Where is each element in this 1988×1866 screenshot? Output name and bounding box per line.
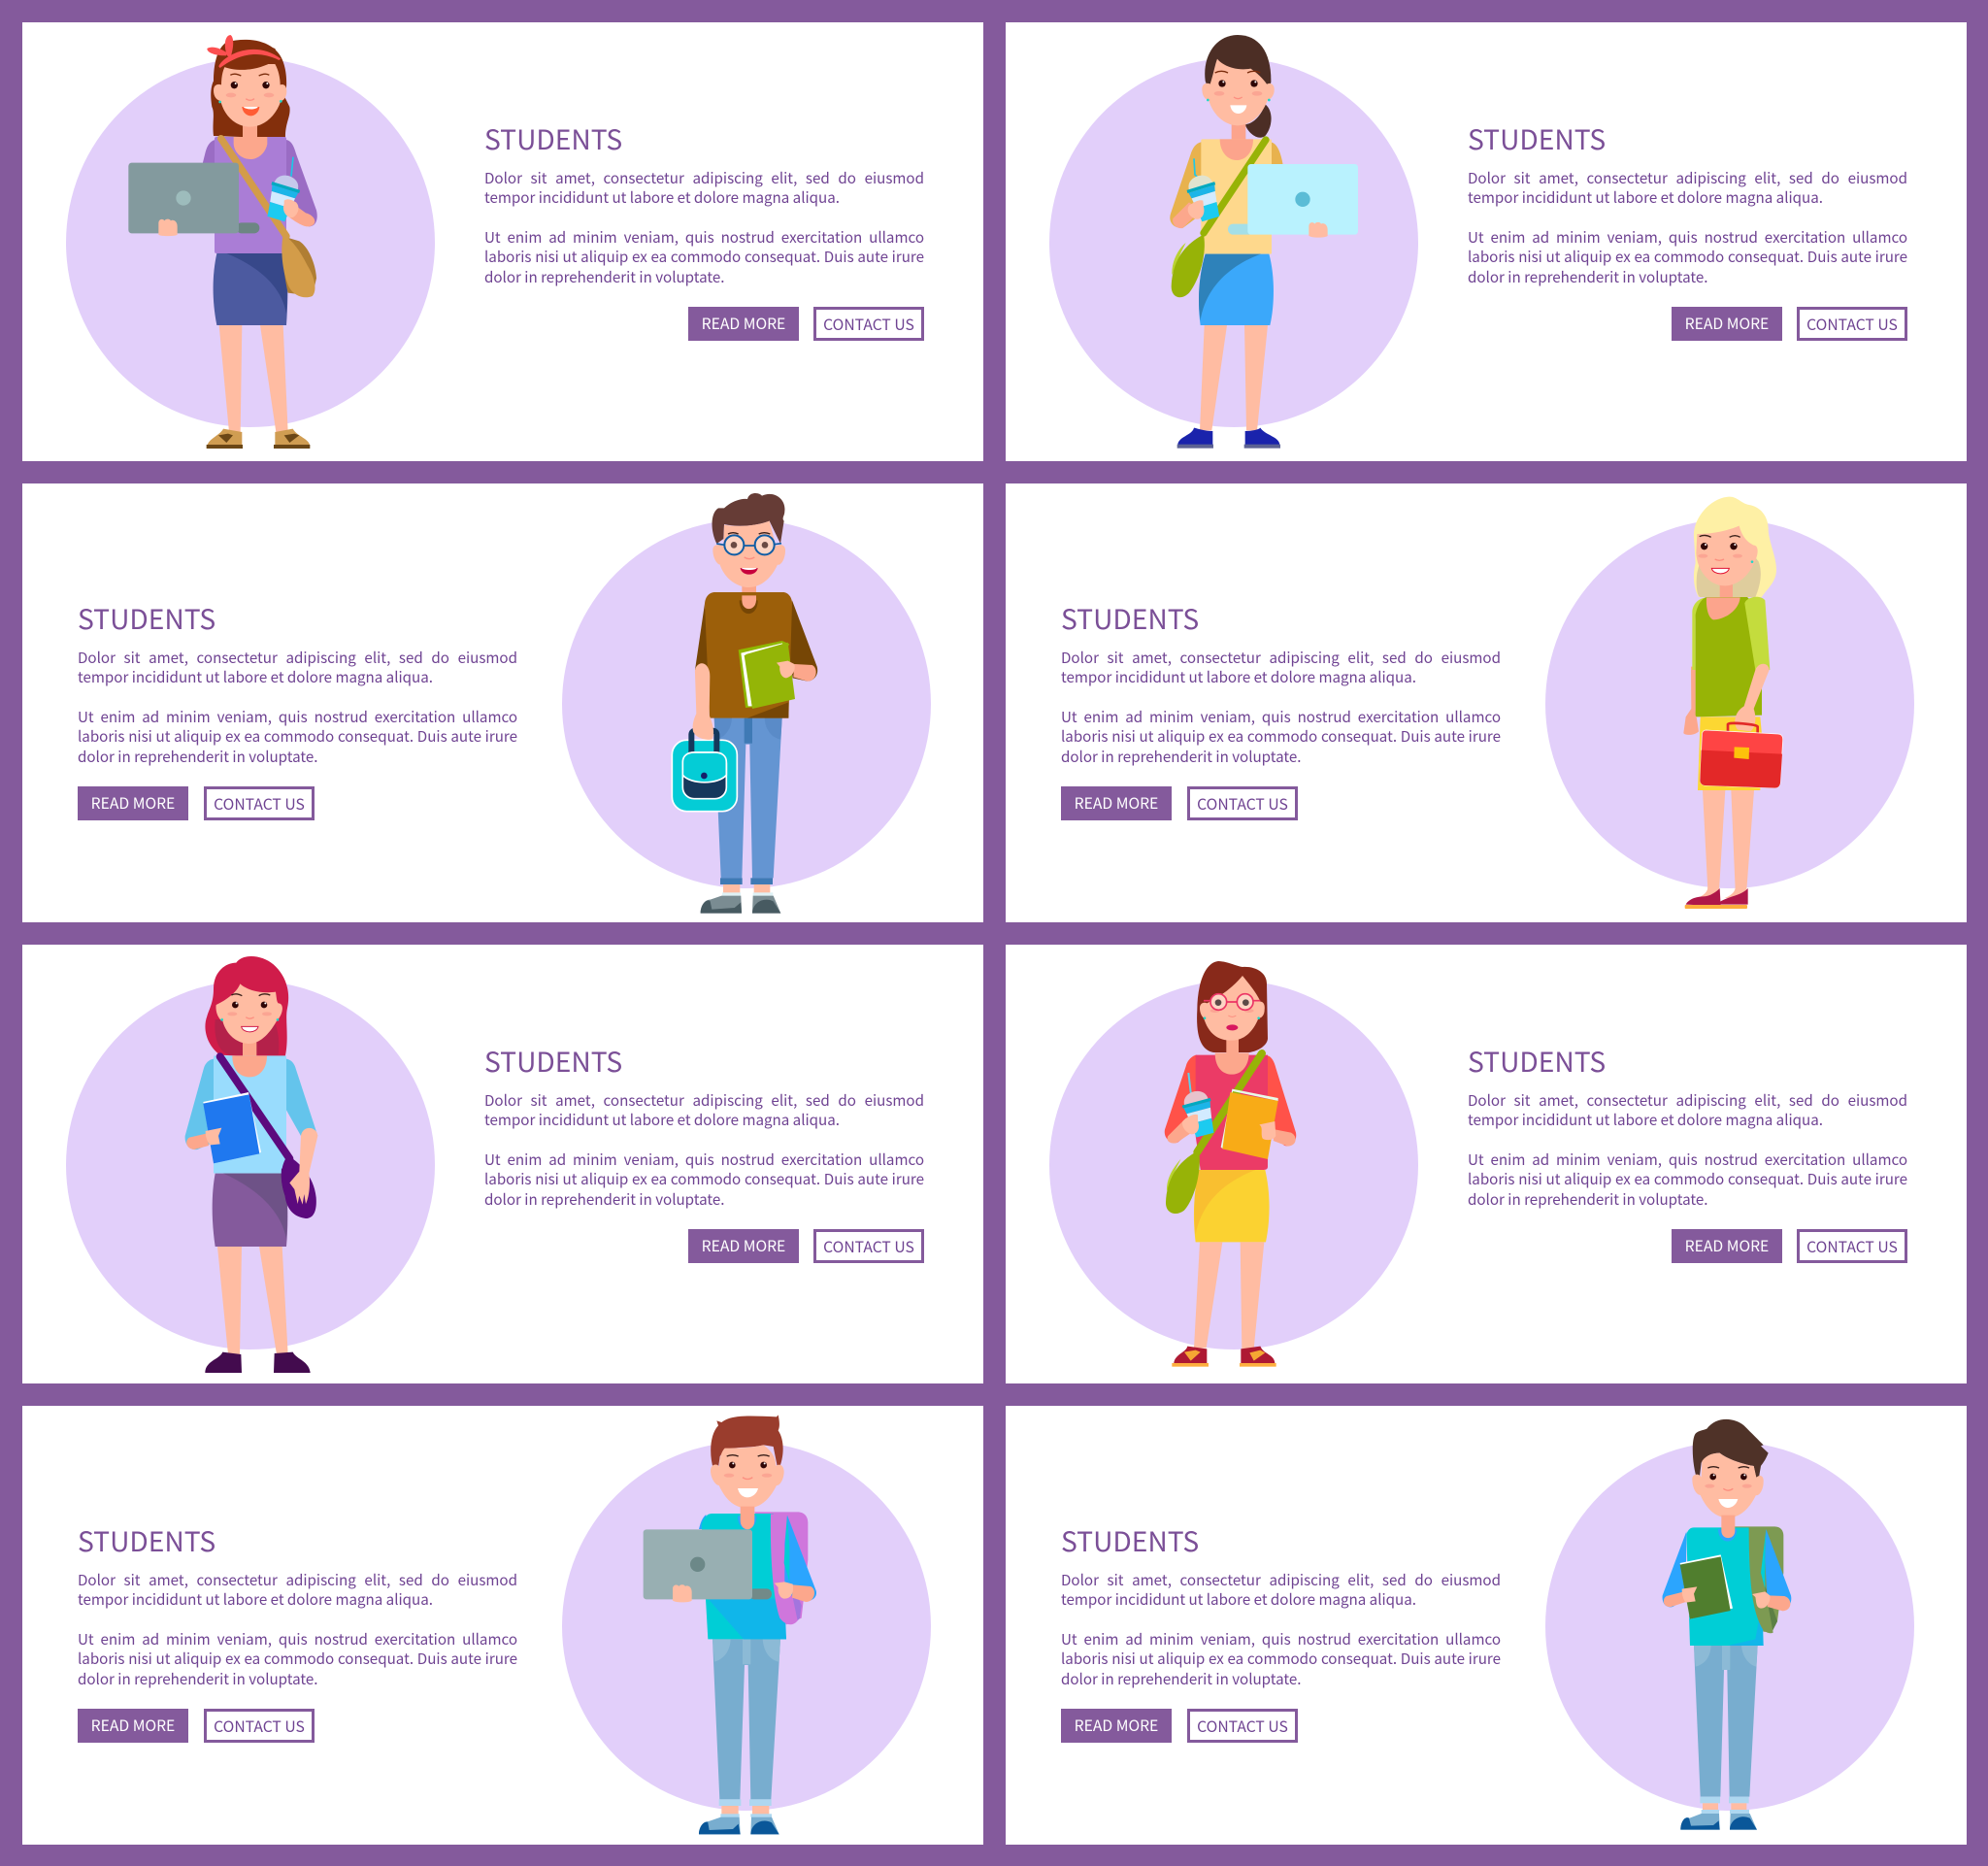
illustration: student 4 with red briefcase [1545, 497, 1914, 909]
paragraph 2: dolor in reprehenderit in voluptate. [78, 1668, 318, 1689]
icon: takeaway cup [1183, 158, 1225, 223]
paragraph 2: dolor in reprehenderit in voluptate. [1061, 746, 1302, 767]
background circle [1049, 58, 1418, 427]
background circle [1545, 519, 1914, 888]
panel: student 4 [1006, 483, 1967, 922]
button: read more [688, 1229, 799, 1263]
icon: blue book [203, 1092, 261, 1163]
button: contact us: CONTACT US [214, 1715, 305, 1737]
paragraph 2: laboris nisi ut aliquip ex ea commodo consequat. Duis aute irure [1061, 1648, 1501, 1669]
figure: red-haired girl [185, 956, 317, 1373]
panel: student 1 [22, 22, 983, 461]
background circle [66, 58, 435, 427]
panel: student 2 [1006, 22, 1967, 461]
icon: green shoulder bag [1172, 140, 1266, 297]
paragraph 2: laboris nisi ut aliquip ex ea commodo consequat. Duis aute irure [1468, 246, 1907, 267]
panel: student 7 [22, 1406, 983, 1845]
paragraph 2: Ut enim ad minim veniam, quis nostrud exercitation ullamco [484, 226, 924, 248]
illustration: student 7 with laptop and purple backpack [562, 1416, 931, 1835]
heading: STUDENTS [1468, 118, 1606, 157]
paragraph 2: Ut enim ad minim veniam, quis nostrud exercitation ullamco [1468, 1149, 1907, 1170]
icon: backpack strap and sleeve [1749, 1527, 1791, 1633]
button: read more [1672, 307, 1782, 341]
icon: takeaway cup [1179, 1073, 1219, 1139]
button: contact us [813, 1229, 924, 1263]
paragraph 1 [484, 167, 924, 208]
button: read more [1061, 1709, 1172, 1743]
paragraph 1 [78, 1569, 517, 1610]
text block and buttons [484, 1041, 924, 1263]
text block and buttons [78, 598, 517, 820]
heading: STUDENTS [1061, 1520, 1199, 1559]
figure: boy with glasses [672, 493, 817, 914]
paragraph 1: Dolor sit amet, consectetur adipiscing elit, sed do eiusmod [78, 647, 517, 668]
paragraph 1 [1468, 1089, 1907, 1130]
paragraph 2: Ut enim ad minim veniam, quis nostrud exercitation ullamco [484, 1149, 924, 1170]
background circle [66, 981, 435, 1350]
icon: backpack strap and sleeve [771, 1514, 816, 1624]
paragraph 2 [484, 226, 924, 287]
icon: green book [1680, 1554, 1733, 1619]
heading: STUDENTS [1061, 598, 1199, 637]
figure: girl with ponytail [1170, 35, 1358, 449]
button: contact us: CONTACT US [1197, 792, 1288, 815]
text block and buttons [78, 1520, 517, 1743]
paragraph 2: dolor in reprehenderit in voluptate. [1061, 1668, 1302, 1689]
paragraph 2 [484, 1149, 924, 1210]
button: contact us: CONTACT US [1806, 1235, 1898, 1257]
paragraph 2 [1061, 1628, 1501, 1689]
paragraph 1: Dolor sit amet, consectetur adipiscing elit, sed do eiusmod [1061, 647, 1501, 668]
paragraph 2: laboris nisi ut aliquip ex ea commodo consequat. Duis aute irure [484, 246, 924, 267]
button: contact us: CONTACT US [214, 792, 305, 815]
illustration: student 1 with laptop, cup and tan bag [66, 35, 435, 449]
button: read more: READ MORE [1075, 1714, 1158, 1736]
icon: green shoulder bag [1166, 1053, 1262, 1214]
button: read more: READ MORE [91, 791, 175, 814]
heading: STUDENTS [484, 118, 622, 157]
panel: student 5 [22, 945, 983, 1383]
icon: light blue laptop [1228, 164, 1358, 238]
button: contact us: CONTACT US [823, 313, 914, 335]
heading: STUDENTS [1468, 1041, 1606, 1080]
paragraph 1: tempor incididunt ut labore et dolore magna aliqua. [78, 1588, 433, 1610]
button: read more: READ MORE [1685, 1234, 1769, 1256]
icon: gray laptop [644, 1529, 772, 1602]
text block and buttons [1061, 598, 1501, 820]
paragraph 1: Dolor sit amet, consectetur adipiscing elit, sed do eiusmod [1061, 1569, 1501, 1590]
background circle [1545, 1442, 1914, 1811]
button: contact us [1797, 307, 1907, 341]
illustration: student 6 with orange book and cup [1049, 961, 1418, 1367]
button: contact us [1187, 786, 1298, 820]
illustration: student 3 with book and teal bag [562, 493, 931, 914]
paragraph 2 [78, 1628, 517, 1689]
text block and buttons [1061, 1520, 1501, 1743]
paragraph 2: laboris nisi ut aliquip ex ea commodo consequat. Duis aute irure [484, 1168, 924, 1189]
icon: green book [739, 641, 795, 709]
text block and buttons [484, 118, 924, 341]
figure: girl with red headband [128, 35, 317, 449]
button: contact us: CONTACT US [823, 1235, 914, 1257]
text block and buttons [1468, 1041, 1907, 1263]
paragraph 1: Dolor sit amet, consectetur adipiscing elit, sed do eiusmod [1468, 1089, 1907, 1111]
paragraph 2: Ut enim ad minim veniam, quis nostrud exercitation ullamco [78, 1628, 517, 1649]
button: read more [1061, 786, 1172, 820]
icon: gray laptop [128, 163, 259, 236]
paragraph 1 [1468, 167, 1907, 208]
icon: teal bag [672, 731, 737, 812]
panel: student 3 [22, 483, 983, 922]
paragraph 1: Dolor sit amet, consectetur adipiscing elit, sed do eiusmod [484, 167, 924, 188]
figure: boy with dark hair [1663, 1419, 1791, 1830]
panel: student 6 [1006, 945, 1967, 1383]
paragraph 1: tempor incididunt ut labore et dolore magna aliqua. [1468, 1109, 1823, 1130]
paragraph 2: laboris nisi ut aliquip ex ea commodo consequat. Duis aute irure [78, 725, 517, 747]
paragraph 1: tempor incididunt ut labore et dolore magna aliqua. [1061, 666, 1416, 687]
icon: red briefcase [1700, 723, 1783, 788]
paragraph 1: tempor incididunt ut labore et dolore magna aliqua. [484, 1109, 840, 1130]
button: contact us: CONTACT US [1197, 1715, 1288, 1737]
button: read more [78, 786, 188, 820]
paragraph 2: Ut enim ad minim veniam, quis nostrud exercitation ullamco [1061, 706, 1501, 727]
illustration: student 2 with light blue laptop and green bag [1049, 35, 1418, 449]
paragraph 2: dolor in reprehenderit in voluptate. [484, 266, 725, 287]
heading: STUDENTS [78, 1520, 215, 1559]
paragraph 2: Ut enim ad minim veniam, quis nostrud exercitation ullamco [1061, 1628, 1501, 1649]
panel: student 8 [1006, 1406, 1967, 1845]
button: read more: READ MORE [1075, 791, 1158, 814]
button: contact us [1797, 1229, 1907, 1263]
paragraph 2: Ut enim ad minim veniam, quis nostrud exercitation ullamco [1468, 226, 1907, 248]
paragraph 1: Dolor sit amet, consectetur adipiscing elit, sed do eiusmod [484, 1089, 924, 1111]
figure: blonde girl [1683, 497, 1783, 909]
figure: girl with red glasses [1165, 961, 1296, 1367]
paragraph 2 [78, 706, 517, 767]
button: read more [78, 1709, 188, 1743]
button: read more: READ MORE [702, 1234, 785, 1256]
button: read more: READ MORE [702, 312, 785, 334]
illustration: student 5 with blue book and purple bag [66, 956, 435, 1373]
paragraph 1: Dolor sit amet, consectetur adipiscing elit, sed do eiusmod [1468, 167, 1907, 188]
button: read more [1672, 1229, 1782, 1263]
paragraph 1: tempor incididunt ut labore et dolore magna aliqua. [78, 666, 433, 687]
background circle [562, 1442, 931, 1811]
paragraph 2: laboris nisi ut aliquip ex ea commodo consequat. Duis aute irure [1468, 1168, 1907, 1189]
heading: STUDENTS [78, 598, 215, 637]
heading: STUDENTS [484, 1041, 622, 1080]
paragraph 2 [1468, 226, 1907, 287]
button: read more: READ MORE [1685, 312, 1769, 334]
paragraph 2: laboris nisi ut aliquip ex ea commodo consequat. Duis aute irure [1061, 725, 1501, 747]
paragraph 1 [1061, 1569, 1501, 1610]
paragraph 1 [1061, 647, 1501, 687]
paragraph 2: dolor in reprehenderit in voluptate. [1468, 266, 1708, 287]
paragraph 2 [1468, 1149, 1907, 1210]
paragraph 1 [78, 647, 517, 687]
background circle [562, 519, 931, 888]
icon: takeaway cup [262, 157, 303, 223]
icon: tan shoulder bag [221, 139, 316, 297]
paragraph 2: dolor in reprehenderit in voluptate. [484, 1188, 725, 1210]
paragraph 1: tempor incididunt ut labore et dolore magna aliqua. [1468, 186, 1823, 208]
button: contact us: CONTACT US [1806, 313, 1898, 335]
paragraph 2: Ut enim ad minim veniam, quis nostrud exercitation ullamco [78, 706, 517, 727]
button: contact us [1187, 1709, 1298, 1743]
button: read more [688, 307, 799, 341]
button: contact us [813, 307, 924, 341]
paragraph 2: laboris nisi ut aliquip ex ea commodo consequat. Duis aute irure [78, 1648, 517, 1669]
paragraph 1 [484, 1089, 924, 1130]
paragraph 2: dolor in reprehenderit in voluptate. [78, 746, 318, 767]
button: contact us [204, 1709, 315, 1743]
button: contact us [204, 786, 315, 820]
icon: orange book [1221, 1089, 1278, 1159]
paragraph 1: Dolor sit amet, consectetur adipiscing elit, sed do eiusmod [78, 1569, 517, 1590]
icon: purple shoulder bag [220, 1056, 316, 1218]
background circle [1049, 981, 1418, 1350]
paragraph 1: tempor incididunt ut labore et dolore magna aliqua. [1061, 1588, 1416, 1610]
text block and buttons [1468, 118, 1907, 341]
illustration: student 8 with green book and backpack [1545, 1419, 1914, 1830]
paragraph 2 [1061, 706, 1501, 767]
paragraph 1: tempor incididunt ut labore et dolore magna aliqua. [484, 186, 840, 208]
button: read more: READ MORE [91, 1714, 175, 1736]
paragraph 2: dolor in reprehenderit in voluptate. [1468, 1188, 1708, 1210]
figure: boy with auburn hair [644, 1415, 816, 1834]
